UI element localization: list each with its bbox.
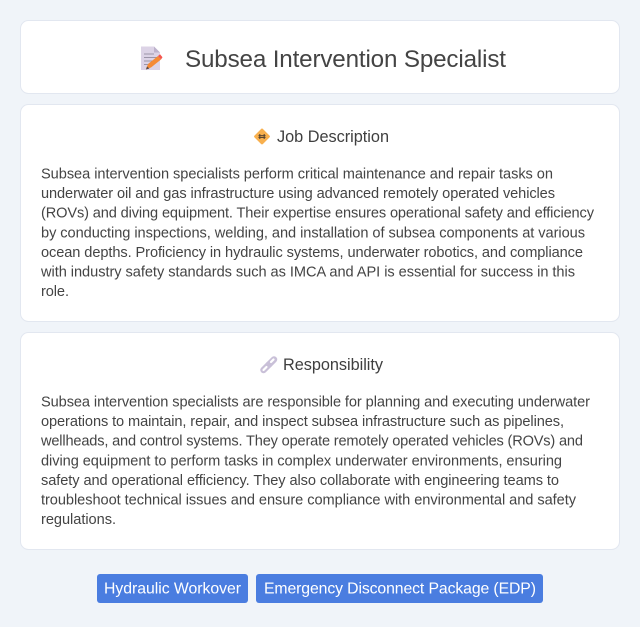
text block: responsibility: diving equipment to perform tasks in complex underwater environments, ensuring [41, 453, 562, 469]
text block: responsibility: Subsea intervention specialists are responsible for planning and executing underwater [41, 394, 590, 410]
text block: responsibility: troubleshoot technical issues and ensure compliance with environmental and safety [41, 492, 577, 508]
text block: responsibility [40, 394, 590, 528]
icon: document with pencil [141, 46, 162, 70]
panel: title card [20, 20, 620, 94]
text block: job description [40, 166, 595, 300]
text block: job description: ocean depths. Proficiency in hydraulic systems, underwater robotics, and compliance [41, 245, 583, 261]
text block: job description: Subsea intervention specialists perform critical maintenance and repair tasks on [41, 166, 553, 182]
text block: responsibility: operations to maintain, repair, and inspect subsea infrastructure such as pipelines, [41, 414, 564, 430]
heading: job description: Job Description [277, 128, 389, 146]
text block: responsibility: wellheads, and control systems. They operate remotely operated vehicles (ROVs) and [40, 434, 583, 450]
icon: construction diamond [254, 128, 270, 145]
tag: hydraulic workover: Hydraulic Workover [104, 580, 241, 598]
text block: job description: by conducting inspections, welding, and installation of subsea components at various [41, 225, 585, 241]
panel: responsibility [20, 332, 620, 550]
panel: job description [20, 104, 620, 322]
text block: job description: role. [41, 284, 69, 300]
heading: responsibility: Responsibility [283, 356, 384, 374]
text block: responsibility: safety and operational efficiency. They also collaborate with engineering teams to [41, 473, 559, 489]
text block: job description: underwater oil and gas infrastructure using advanced remotely operated vehicles [41, 186, 555, 202]
tag: hydraulic workover [97, 574, 248, 603]
icon: chain link [264, 360, 274, 370]
text block: responsibility: regulations. [41, 512, 116, 528]
title: Subsea Intervention Specialist [185, 46, 506, 73]
text block: job description: with industry safety standards such as IMCA and API is essential for success in this [40, 264, 575, 280]
tag: emergency disconnect package [256, 574, 543, 603]
text block: job description: (ROVs) and diving equipment. Their expertise ensures operational safety and efficiency [41, 206, 595, 222]
tag: emergency disconnect package: Emergency Disconnect Package (EDP) [264, 580, 536, 598]
